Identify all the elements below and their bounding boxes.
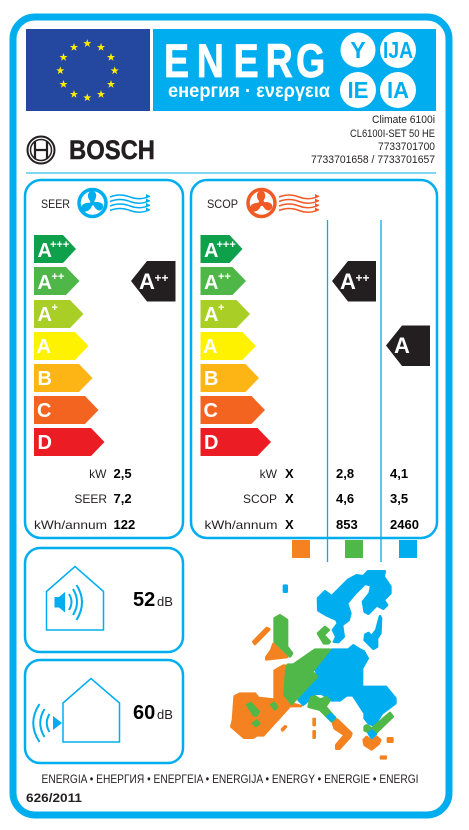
climate zone map of Europe — [231, 571, 395, 758]
energy scale: C — [37, 400, 51, 422]
data table: SEER — [74, 492, 107, 506]
panel: outdoor noise — [25, 660, 183, 763]
model information: 7733701700 — [378, 141, 435, 153]
energy scale: A — [204, 240, 218, 262]
data table: 853 — [336, 517, 358, 532]
energy scale: C — [204, 400, 218, 422]
energy scale: A — [36, 336, 51, 358]
energy scale: + — [52, 302, 58, 314]
energy scale: A — [38, 240, 52, 262]
model information: Climate 6100i — [372, 114, 435, 126]
energy scale: ++ — [218, 271, 231, 283]
rating arrow: A++: A — [340, 269, 356, 294]
panel: indoor noise — [25, 548, 183, 652]
data table: 2,5 — [114, 466, 132, 481]
rating arrow: A++ — [332, 261, 376, 302]
EU flag — [26, 29, 150, 111]
energy banner — [153, 29, 436, 111]
panel: SEER cooling — [25, 180, 183, 538]
energy scale: A — [204, 304, 218, 326]
energy banner: IE — [348, 77, 368, 103]
rating arrow: A — [386, 326, 430, 366]
data table: kW — [260, 467, 278, 481]
data table: X — [285, 517, 294, 532]
data table: SCOP — [243, 492, 277, 506]
icon: cooling fan — [79, 190, 150, 216]
outdoor noise value: dB — [157, 707, 173, 722]
energy scale — [200, 235, 271, 456]
energy banner: IJA — [383, 37, 413, 63]
energy scale: A — [38, 304, 52, 326]
data table: 2,8 — [336, 466, 354, 481]
Bosch logo — [28, 135, 155, 165]
data table — [34, 466, 135, 532]
data table: 4,1 — [390, 466, 408, 481]
data table: 4,6 — [336, 491, 354, 506]
energy banner: IA — [387, 77, 409, 103]
data table: kWh/annum — [34, 518, 107, 532]
indoor noise value: 52 — [133, 589, 155, 611]
energy scale: + — [218, 302, 224, 314]
data table: X — [285, 466, 294, 481]
panel: SCOP heating — [191, 180, 437, 562]
regulation number: 626/2011 — [26, 791, 82, 805]
energy scale: +++ — [50, 239, 69, 251]
data table: 122 — [114, 517, 135, 532]
climate zone legend — [292, 540, 417, 558]
energy scale: B — [38, 368, 52, 390]
rating arrow: A++ — [131, 261, 176, 302]
energy scale: A — [38, 272, 52, 294]
indoor noise value: dB — [157, 594, 173, 609]
rating arrow: A++: ++ — [356, 271, 370, 285]
model information: 7733701658 / 7733701657 — [311, 154, 435, 166]
energy scale: D — [38, 432, 52, 454]
energy banner: ENERG — [164, 35, 325, 88]
energy scale: D — [204, 432, 218, 454]
rating arrow: A: A — [394, 333, 410, 358]
energy scale: A — [204, 272, 218, 294]
icon: house with outdoor speaker — [33, 678, 120, 742]
data table: 7,2 — [114, 491, 132, 506]
data table — [204, 466, 419, 532]
SCOP heading: SCOP — [207, 197, 238, 211]
energy scale: ++ — [52, 271, 64, 283]
data table: kW — [89, 467, 107, 481]
SEER heading: SEER — [41, 197, 70, 211]
energy banner: Y — [350, 37, 366, 63]
energy scale: +++ — [216, 239, 236, 251]
data table: 2460 — [390, 517, 419, 532]
outdoor noise value: 60 — [133, 702, 155, 724]
icon: house with indoor speaker — [46, 566, 104, 630]
energy scale: A — [203, 336, 217, 358]
rating arrow: A++: A — [139, 269, 155, 294]
Bosch logo: BOSCH — [69, 135, 155, 165]
energy scale: B — [204, 368, 218, 390]
rating arrow: A++: ++ — [154, 271, 169, 285]
energy scale — [34, 235, 104, 456]
model information — [311, 114, 435, 166]
energy banner: енергия · ενεργεια — [168, 81, 330, 102]
icon: heating fan — [248, 190, 319, 216]
data table: 3,5 — [390, 491, 408, 506]
data table: kWh/annum — [204, 518, 278, 532]
model information: CL6100I-SET 50 HE — [350, 128, 435, 140]
data table: X — [285, 491, 294, 506]
